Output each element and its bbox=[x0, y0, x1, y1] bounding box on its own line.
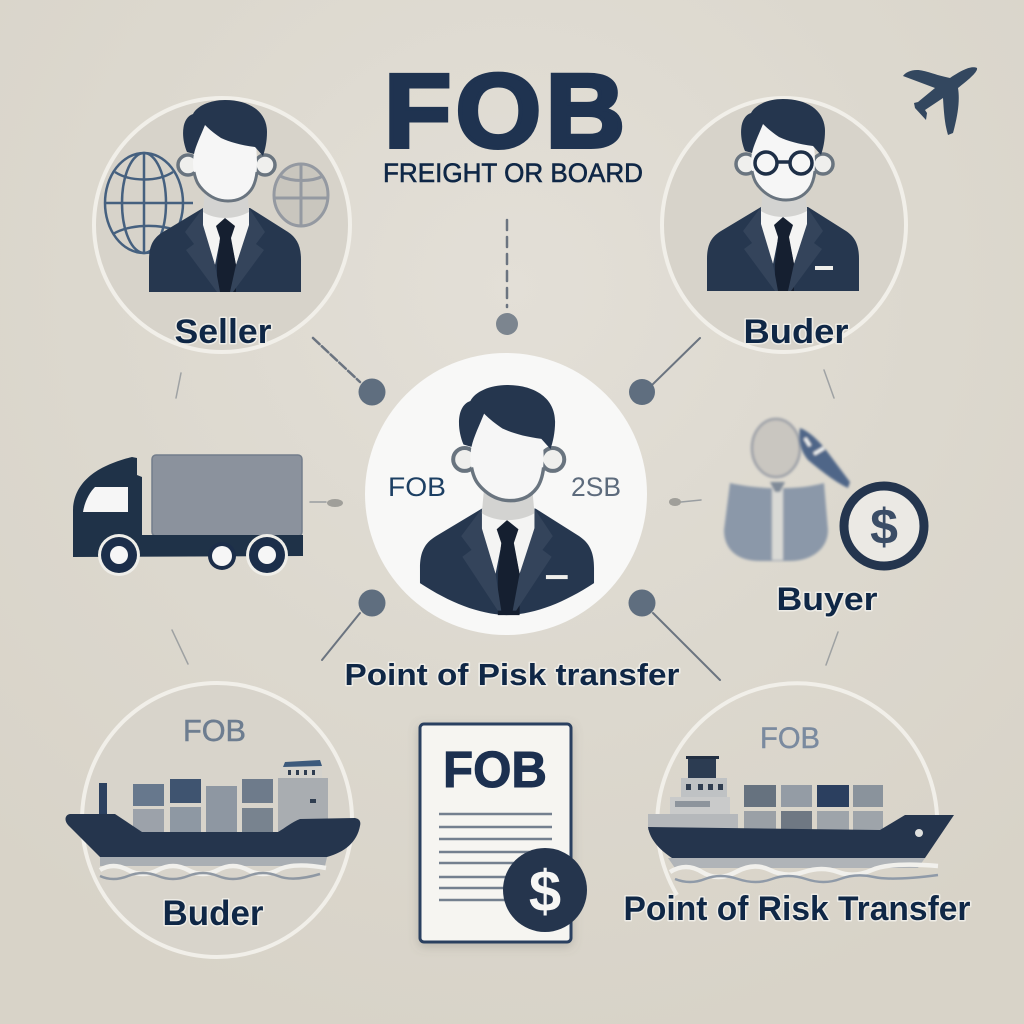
truck cab and chassis bbox=[73, 457, 303, 557]
icon: large globe bbox=[105, 153, 193, 253]
icon: dollar coin bbox=[844, 486, 924, 566]
panel: FOB document bbox=[420, 724, 587, 942]
icon: buyer figure bbox=[707, 99, 859, 291]
document heading: FOB bbox=[443, 741, 547, 798]
label: FOB: FOB bbox=[183, 713, 246, 748]
icon: cargo ship bbox=[648, 756, 954, 882]
connector lines and nodes bbox=[172, 220, 838, 680]
icon: pen bbox=[799, 428, 850, 488]
label: buyer: Buyer bbox=[776, 581, 878, 617]
label: 2SB: 2SB bbox=[571, 472, 621, 502]
icon: cargo ship bbox=[66, 760, 360, 879]
label: buder: Buder bbox=[162, 894, 264, 933]
icon: seller figure bbox=[149, 100, 301, 292]
panel: ship left bbox=[66, 683, 360, 957]
truck wheels bbox=[98, 534, 288, 576]
icon: small globe bbox=[274, 164, 328, 226]
water bbox=[100, 857, 327, 879]
label: point of risk transfer: Point of Risk Transfer bbox=[624, 890, 970, 928]
truck box bbox=[152, 455, 302, 536]
water bbox=[668, 858, 938, 882]
title: FOB bbox=[384, 52, 629, 169]
label: point of pisk transfer: Point of Pisk transfer bbox=[344, 657, 680, 692]
label: seller: Seller bbox=[174, 313, 272, 351]
icon: dollar badge: $ bbox=[529, 859, 561, 924]
panel: centre figure bbox=[365, 353, 647, 635]
label: buder: Buder bbox=[744, 313, 848, 351]
icon: centre person bbox=[420, 385, 594, 615]
icon: dollar coin: $ bbox=[870, 499, 898, 555]
icon: faded buyer figure bbox=[724, 419, 828, 561]
icon: truck bbox=[73, 455, 303, 576]
document lines bbox=[439, 814, 552, 900]
panel: seller bbox=[94, 98, 350, 352]
panel: buyer with coin bbox=[724, 419, 924, 617]
label: FOB: FOB bbox=[760, 722, 820, 755]
icon: airplane bbox=[903, 67, 977, 135]
panel: ship right bbox=[624, 683, 970, 928]
label: FOB: FOB bbox=[388, 472, 446, 502]
icon: dollar badge bbox=[503, 848, 587, 932]
subtitle: FREIGHT OR BOARD bbox=[383, 158, 643, 188]
panel: buyer with glasses bbox=[662, 98, 906, 352]
